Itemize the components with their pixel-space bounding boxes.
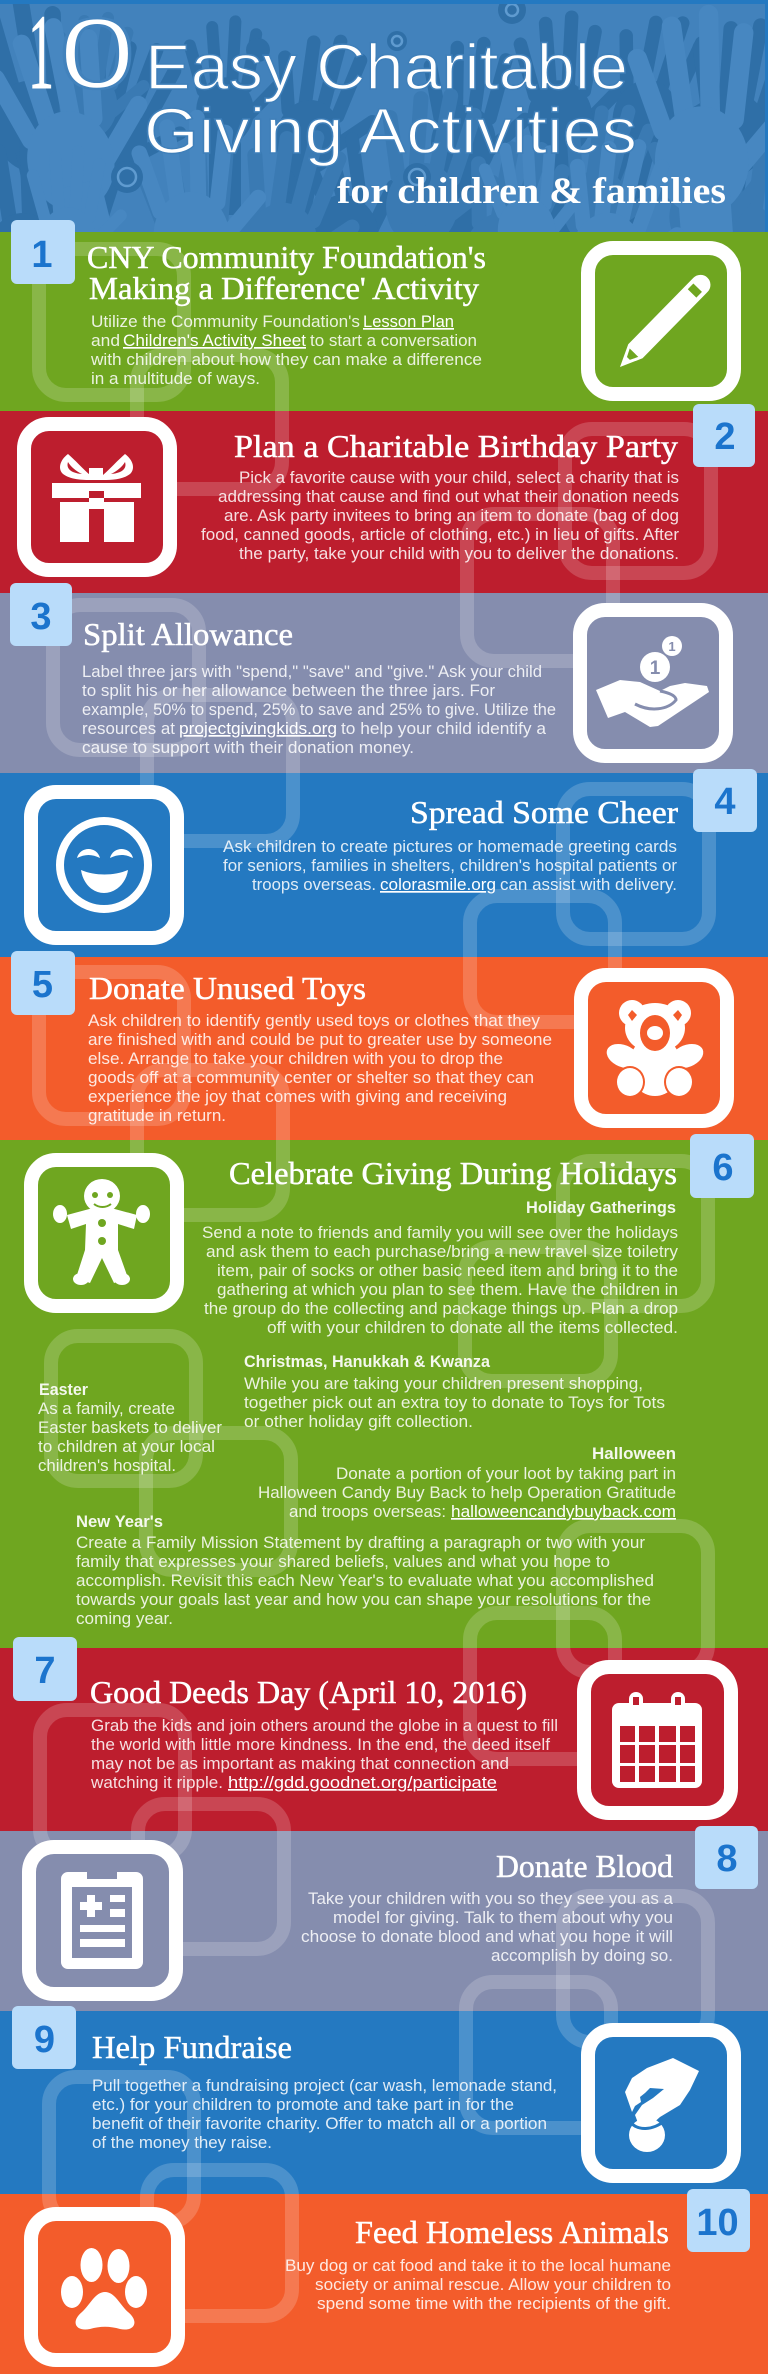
number badge 4: 4: [714, 781, 736, 823]
text: activity 3: to split his or her allowance between the three jars. For: [82, 681, 495, 700]
text: activity 3: [82, 662, 556, 757]
number badge 8: [695, 1826, 758, 1889]
text: activity 1: [90, 312, 482, 388]
panel: activity 10: [0, 2189, 768, 2374]
number badge 2: 2: [714, 416, 736, 458]
title: Giving Activities: [144, 95, 637, 167]
text: holiday gatherings: Holiday Gatherings: [526, 1199, 676, 1217]
icon: paw print: [31, 2214, 178, 2360]
icon: smiley: [31, 792, 177, 938]
text: activity 8: [301, 1889, 674, 1965]
text: easter: [38, 1381, 222, 1475]
text: activity 1: Lesson Plan: [363, 312, 454, 331]
text: activity 8: Take your children with you so they see you as a: [308, 1889, 674, 1908]
text: activity 1: Children's Activity Sheet: [123, 331, 306, 350]
text: activity 10: society or animal rescue. Allow your children to: [315, 2275, 671, 2294]
panel: activity 6: [0, 1134, 768, 1648]
icon: teddy bear: [581, 975, 727, 1121]
icon: medical clipboard: [29, 1847, 176, 1994]
text: activity 10: [285, 2256, 671, 2313]
icon: calendar: [584, 1667, 731, 1813]
number badge 7: 7: [34, 1650, 56, 1692]
text: holiday gatherings: Send a note to friends and family you will see over the holidays: [202, 1223, 678, 1242]
number badge 5: 5: [32, 964, 53, 1006]
heading: activity 2: Plan a Charitable Birthday Party: [234, 428, 678, 464]
header banner with raised hands: [0, 0, 768, 232]
heading: activity 10: Feed Homeless Animals: [355, 2214, 669, 2250]
number badge 2: [693, 404, 755, 467]
text: easter: children's hospital.: [38, 1456, 176, 1475]
text: halloween: Donate a portion of your loot by taking part in: [336, 1464, 676, 1483]
title: 0: [59, 0, 135, 110]
text: activity 5: are finished with and could be put to greater use by someone: [88, 1030, 552, 1049]
heading: activity 1: Making a Difference' Activity: [89, 270, 479, 306]
heading: activity 4: Spread Some Cheer: [410, 794, 678, 830]
icon: gift: [24, 424, 170, 570]
text: new year's: New Year's: [76, 1513, 163, 1531]
text: activity 9: Pull together a fundraising project (car wash, lemonade stand,: [92, 2076, 557, 2095]
number badge 5: [11, 951, 75, 1015]
text: easter: As a family, create: [38, 1399, 175, 1418]
text: activity 2: [201, 468, 679, 563]
text: christmas, hanukkah and kwanza: or other holiday gift collection.: [244, 1412, 473, 1431]
text: activity 10: spend some time with the recipients of the gift.: [317, 2294, 671, 2313]
text: activity 1: and: [91, 331, 120, 350]
number badge 8: 8: [716, 1838, 738, 1880]
text: activity 9: of the money they raise.: [92, 2133, 272, 2152]
text: easter: Easter: [39, 1381, 89, 1399]
number badge 6: 6: [712, 1147, 734, 1189]
panel: activity 8: [0, 1826, 768, 2011]
text: activity 7: watching it ripple.: [90, 1773, 223, 1792]
text: holiday gatherings: gathering at which you plan to see them. Have the children in: [217, 1280, 678, 1299]
text: holiday gatherings: off with your children to donate all the items collected.: [267, 1318, 678, 1337]
number badge 1: [11, 220, 75, 284]
icon: gingerbread man: [31, 1160, 177, 1306]
text: halloween: [258, 1445, 676, 1521]
panel: activity 9: [0, 2006, 768, 2194]
text: activity 2: Pick a favorite cause with your child, select a charity that is: [239, 468, 679, 487]
text: activity 3: Label three jars with "spend," "save" and "give." Ask your child: [82, 662, 542, 681]
title: Easy Charitable: [145, 31, 628, 103]
text: activity 10: Buy dog or cat food and take it to the local humane: [285, 2256, 671, 2275]
text: halloween: and troops overseas:: [289, 1502, 446, 1521]
number badge 10: 10: [696, 2202, 739, 2244]
panel: activity 4: [0, 769, 768, 957]
heading: activity 1: [87, 239, 486, 306]
text: activity 3: resources at: [82, 719, 175, 738]
text: halloween: Halloween: [592, 1445, 676, 1463]
heading: activity 7: Good Deeds Day (April 10, 2016): [90, 1674, 527, 1710]
icon: hand with coins: 1: [650, 658, 661, 679]
number badge 3: [10, 583, 72, 646]
icon: hand with coins: [580, 610, 726, 756]
heading: activity 3: Split Allowance: [83, 616, 293, 652]
icon: pencil: [588, 248, 734, 394]
number badge 4: [693, 769, 757, 832]
text: activity 1: in a multitude of ways.: [91, 369, 260, 388]
text: activity 2: are. Ask party invitees to bring an item to donate (bag of dog: [224, 506, 679, 525]
number badge 9: 9: [34, 2019, 55, 2061]
text: christmas, hanukkah and kwanza: Christmas, Hanukkah & Kwanza: [244, 1353, 491, 1371]
text: activity 4: colorasmile.org: [380, 875, 496, 894]
icon: hand dropping a coin: [588, 2030, 734, 2176]
number badge 7: [13, 1637, 77, 1701]
title: for children & families: [337, 171, 726, 212]
text: new year's: Create a Family Mission Statement by drafting a paragraph or two with your: [76, 1533, 645, 1552]
text: activity 3: example, 50% to spend, 25% to save and 25% to give. Utilize the: [82, 700, 556, 719]
text: activity 5: experience the joy that comes with giving and receiving: [88, 1087, 507, 1106]
text: holiday gatherings: [202, 1199, 679, 1337]
text: activity 4: can assist with delivery.: [500, 875, 677, 894]
text: activity 4: for seniors, families in shelters, children's hospital patients or: [223, 856, 677, 875]
panel: activity 7: [0, 1637, 768, 1831]
text: holiday gatherings: the group do the collecting and package things up. Plan a drop: [204, 1299, 678, 1318]
panel: activity 2: [0, 404, 768, 593]
text: activity 1: with children about how they can make a difference: [90, 350, 482, 369]
text: activity 4: [223, 837, 677, 894]
text: christmas, hanukkah and kwanza: together pick out an extra toy to donate to Toys for Tots: [244, 1393, 665, 1412]
text: activity 5: gratitude in return.: [88, 1106, 226, 1125]
text: easter: to children at your local: [38, 1437, 215, 1456]
text: activity 5: [88, 1011, 552, 1125]
text: new year's: accomplish. Revisit this each New Year's to evaluate what you accomplished: [76, 1571, 654, 1590]
text: activity 9: benefit of their favorite charity. Offer to match all or a portion: [92, 2114, 547, 2133]
text: new year's: family that expresses your shared beliefs, values and what you hope to: [76, 1552, 610, 1571]
text: activity 8: choose to donate blood and what you hope it will: [301, 1927, 673, 1946]
text: new year's: coming year.: [76, 1609, 173, 1628]
text: easter: Easter baskets to deliver: [38, 1418, 222, 1437]
text: activity 3: to help your child identify a: [341, 719, 547, 738]
text: activity 7: http://gdd.goodnet.org/participate: [228, 1773, 497, 1792]
panel: activity 5: [0, 951, 768, 1140]
text: activity 2: the party, take your child with you to deliver the donations.: [239, 544, 679, 563]
text: activity 7: [90, 1716, 558, 1792]
number badge 6: [690, 1134, 754, 1198]
icon: hand with coins: 1: [668, 639, 676, 654]
number badge 9: [12, 2006, 76, 2069]
text: activity 8: model for giving. Talk to them about why you: [333, 1908, 673, 1927]
text: activity 3: projectgivingkids.org: [179, 719, 337, 738]
panel: activity 3: [0, 583, 768, 773]
number badge 3: 3: [30, 596, 52, 638]
title: [28, 0, 726, 212]
text: activity 7: may not be as important as making that connection and: [91, 1754, 509, 1773]
text: activity 1: to start a conversation: [310, 331, 477, 350]
panel: activity 1: [0, 220, 768, 411]
heading: activity 1: CNY Community Foundation's: [87, 239, 486, 275]
text: holiday gatherings: and ask them to each purchase/bring a new travel size toiletry: [206, 1242, 679, 1261]
text: activity 4: Ask children to create pictures or homemade greeting cards: [223, 837, 677, 856]
text: activity 3: cause to support with their donation money.: [82, 738, 414, 757]
text: activity 5: Ask children to identify gently used toys or clothes that they: [88, 1011, 540, 1030]
text: halloween: halloweencandybuyback.com: [451, 1502, 676, 1521]
text: activity 2: addressing that cause and find out what their donation needs: [218, 487, 679, 506]
text: activity 1: Utilize the Community Foundation's: [91, 312, 360, 331]
text: activity 2: food, canned goods, article of clothing, etc.) in lieu of gifts. After: [201, 525, 679, 544]
heading: activity 9: Help Fundraise: [92, 2029, 292, 2065]
heading: activity 5: Donate Unused Toys: [89, 970, 366, 1006]
text: new year's: towards your goals last year and how you can shape your resolutions for the: [76, 1590, 651, 1609]
number badge 1: 1: [31, 234, 53, 276]
heading: activity 8: Donate Blood: [496, 1848, 673, 1884]
text: activity 7: the world with little more kindness. In the end, the deed itself: [91, 1735, 550, 1754]
text: christmas, hanukkah and kwanza: [244, 1353, 665, 1431]
text: halloween: Halloween Candy Buy Back to help Operation Gratitude: [258, 1483, 676, 1502]
number badge 10: [687, 2189, 750, 2252]
text: activity 5: else. Arrange to take your children with you to drop the: [88, 1049, 503, 1068]
text: christmas, hanukkah and kwanza: While you are taking your children present shopping,: [244, 1374, 643, 1393]
text: activity 9: [92, 2076, 557, 2152]
heading: activity 6: Celebrate Giving During Holidays: [229, 1155, 677, 1191]
text: activity 4: troops overseas.: [252, 875, 376, 894]
text: activity 9: etc.) for your children to promote and take part in for the: [92, 2095, 514, 2114]
text: activity 5: goods off at a community center or shelter so that they can: [88, 1068, 534, 1087]
text: activity 8: accomplish by doing so.: [491, 1946, 673, 1965]
text: new year's: [76, 1513, 654, 1628]
text: holiday gatherings: item, pair of socks or other basic need item and bring it to the: [217, 1261, 678, 1280]
text: activity 7: Grab the kids and join others around the globe in a quest to fill: [91, 1716, 558, 1735]
